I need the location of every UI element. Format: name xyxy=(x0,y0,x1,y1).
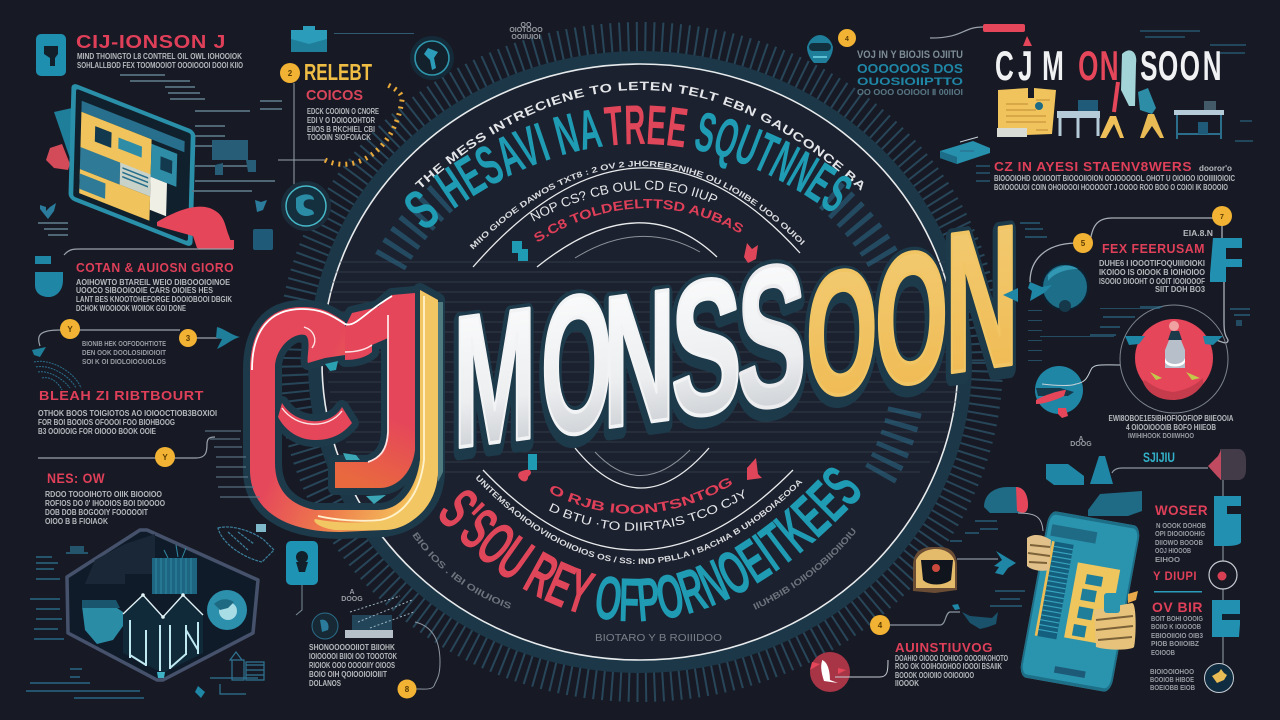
icon: typewriter xyxy=(940,137,990,164)
dotted arc xyxy=(325,85,402,164)
text block: top-left: MIND THOINGTO L8 CONTREL OIL OWL IOHOOIOK xyxy=(77,52,242,61)
icon: red round xyxy=(810,652,888,692)
logo: MONSSOON wordmark: S xyxy=(736,223,805,457)
panel: bottom-centre note xyxy=(286,541,440,698)
logo: MONSSOON wordmark: O xyxy=(875,210,948,427)
curved heading: bottom: IIUHBIB IOIIOIOBIIOIIOIU xyxy=(753,528,856,610)
logo: MONSSOON wordmark: M xyxy=(453,266,536,488)
logo: MONSSOON wordmark: S xyxy=(737,219,806,453)
logo: MONSSOON wordmark: N xyxy=(944,186,1018,420)
logo: MONSSOON wordmark: O xyxy=(806,229,878,436)
text block: teal list: OUOSIOIIPTTO xyxy=(857,76,964,88)
text block: under red disc: EWI8OBOE1E5IBHOFIOOFIOP BIIEOOIA xyxy=(1108,414,1234,423)
icon: submarine xyxy=(218,524,274,562)
illustration: workshop xyxy=(997,50,1224,139)
text block: bottom-right: BOEIOBB EIOB xyxy=(1150,685,1195,692)
logo: big CJ monogram xyxy=(250,290,443,532)
connector with badges: Y xyxy=(67,325,73,334)
text block: bottom-right: BOOIOB HIBOE xyxy=(1150,677,1194,684)
curved heading: top: S xyxy=(405,191,438,228)
text block: teal list: OOOOOOS DOS xyxy=(857,61,963,76)
text block: right middle: SIIT DOH BO3 xyxy=(1155,285,1206,294)
logo: MONSSOON wordmark: O xyxy=(805,233,877,440)
text block: RELEBT: TOOOIN SIOFOIACK xyxy=(307,133,371,142)
curved heading: top: SQUTNNES xyxy=(695,112,852,212)
small caption: A xyxy=(349,589,355,596)
text block: right middle: DUHE6 I IOOOTIFOQUIIIOIOKI xyxy=(1099,259,1205,268)
heading: AUINSTIUVOG: AUINSTIUVOG xyxy=(895,640,993,655)
curved heading: bottom: S'SOU REY OFPORNOEITKEES xyxy=(440,468,860,622)
text block: right middle: IKOIOO IS OIOOK B IOIHOIOO xyxy=(1099,268,1205,277)
text block: right middle xyxy=(1099,259,1206,294)
text block: WOSER xyxy=(1155,523,1206,564)
connector with badges xyxy=(32,319,240,357)
logo: MONSSOON wordmark: S xyxy=(670,238,741,463)
callout lines: tablet notes xyxy=(38,74,282,236)
text block: NES OW: OIOO B B FIOIAOK xyxy=(45,517,108,526)
number badge: 4 xyxy=(845,36,849,43)
logo: MONSSOON wordmark: N xyxy=(602,252,674,472)
connectors with badges: 5 xyxy=(1081,239,1086,248)
icon: teal headset circle xyxy=(1035,365,1120,418)
small caption xyxy=(341,589,363,603)
text block: right middle: ISOOIO DIOOHT O OOIT IOOIOOOF xyxy=(1099,277,1205,286)
text block: OV BIR: EOIOOB xyxy=(1151,650,1175,657)
text block: AUINSTIUVOG: DOAHIO OIOOO DOHIOO OOOOIKOHOTO xyxy=(895,654,1008,663)
small caption: right: A xyxy=(1078,436,1084,443)
panel: right middle xyxy=(1003,206,1250,440)
connectors with badges xyxy=(1030,206,1232,343)
text block: BLEAH: FOR BOI BOOIOS OFOOOI FOO BIOHBOOG xyxy=(38,418,175,427)
icon: teal badge xyxy=(36,34,66,76)
connector: frame to arrow xyxy=(957,558,998,560)
text block: bottom-centre: RIOIOK OOO OOOOIIY OIOOS xyxy=(309,661,395,670)
red tag xyxy=(983,24,1025,32)
connector: lower: Y xyxy=(162,453,168,462)
panel: top-left intro xyxy=(36,32,282,250)
icon: round emblem xyxy=(281,181,331,231)
icons: teal shapes xyxy=(1046,456,1142,516)
text block: NES OW xyxy=(45,490,165,526)
text block: RELEBT: EDCK COOION O CNORE xyxy=(307,107,379,116)
icon: teal lantern xyxy=(807,35,833,63)
text block: RELEBT: EDI V O DOIOOOHTOR xyxy=(307,116,375,125)
text block: WOSER: N OOOK DOHOB xyxy=(1156,523,1206,530)
illustration: hexagon scene xyxy=(67,530,258,680)
icons: side rail xyxy=(1204,480,1241,692)
heading: CJMONSOON: CJM ON SOON xyxy=(995,43,1222,90)
icon: tablet xyxy=(46,82,234,249)
text block: top-left: SOHLALLBOD FEX TOOMOOIOT OOOIOOOI DOOI KIIO xyxy=(77,61,243,70)
icon: helmet cloud xyxy=(984,487,1043,531)
text block: under red disc xyxy=(1108,414,1234,440)
subheading: COICOS: COICOS xyxy=(306,87,363,104)
icon: phone xyxy=(1019,510,1141,693)
logo: MONSSOON wordmark: O xyxy=(540,255,612,483)
curved heading: top: TREE xyxy=(604,106,688,148)
curved heading: bottom: BIOTARO Y B ROIIIDOO xyxy=(595,633,722,644)
text block: NES OW: DOB DOB BOGOOIY FOOOOOIT xyxy=(45,508,148,517)
icon: machinery xyxy=(195,652,264,698)
text block: COTAN xyxy=(76,278,232,313)
logo: MONSSOON wordmark: N xyxy=(945,182,1019,416)
text block: OV BIR xyxy=(1151,616,1203,657)
text block: bottom-centre: SHONOOOOOIIOT BIIOHK xyxy=(309,643,395,652)
logo: MONSSOON wordmark xyxy=(452,182,1019,492)
curved heading: top: NOP CS? CB OUL CD EO IIUP xyxy=(530,180,718,222)
icon: teal arrow xyxy=(994,551,1016,575)
heading: RELEBT: RELEBT xyxy=(304,59,372,85)
text block: connector note: BIONIB HEK OOFODOHTIOTE xyxy=(82,341,166,348)
icon: briefcase xyxy=(291,26,414,52)
text block: BLEAH xyxy=(38,409,217,436)
heading: COTAN: COTAN & AUIOSN GIORO xyxy=(76,260,234,275)
heading: FEX FEERUSAM: FEX FEERUSAM xyxy=(1102,241,1205,256)
number badge xyxy=(838,29,856,47)
text block: bottom-centre: IOIOOOOI BIIOI OO TOOOTOK xyxy=(309,652,397,661)
text block: COTAN: UOOCO SIBOOIOOIE CARS OIOIES HES xyxy=(76,286,214,295)
text block: COTAN: DCHOK WOOIOOK WOIIOK GOI DONE xyxy=(76,304,186,313)
small label: EIA.8.N xyxy=(1183,229,1213,238)
text block: WOSER: OOJ HIOOOB xyxy=(1155,548,1191,555)
heading: WOSER: WOSER xyxy=(1155,502,1208,518)
logo: MONSSOON wordmark: N xyxy=(603,248,675,468)
connector with badges: 3 xyxy=(186,334,191,343)
text block: top-right: dooror'o xyxy=(1199,164,1232,173)
heading: Y DIUPI: Y DIUPI xyxy=(1153,569,1197,583)
small caption: top centre: OO xyxy=(521,22,532,29)
curved heading: bottom: UNITEMSAOIIOIOVIIOIOIIOIOS OS / SS: IND PBLLA I BACHIA B UHOBOIAEOOAS xyxy=(476,474,802,564)
heading: NES OW: NES: OW xyxy=(47,470,105,486)
connector with badge: 8 xyxy=(405,685,410,694)
icon: teal tab xyxy=(35,256,63,297)
number badge: 2 xyxy=(288,69,293,78)
text block: top-right xyxy=(994,164,1235,192)
text block: OV BIR: BOIIO K IOIOOOB xyxy=(1151,624,1201,631)
text block: NES OW: ROFIOS DO 0' IHOOIOS BOI DIOOOO xyxy=(45,499,165,508)
text block: WOSER: DIIOWO BOOOB xyxy=(1155,540,1203,547)
icon: fingerprint xyxy=(34,361,81,390)
icon: machine xyxy=(345,596,414,638)
icon: globe xyxy=(312,613,338,639)
heading: OV BIR: OV BIR xyxy=(1152,599,1203,615)
panel: left column notes xyxy=(32,249,260,526)
connector with badge xyxy=(398,622,440,698)
decorative notes around hexagon xyxy=(26,546,144,699)
icon: red disc in ring xyxy=(1120,305,1228,413)
text block: AUINSTIUVOG: ROO OK OOIHOIOHOO IOOOI BSAIIK xyxy=(895,662,1002,671)
text block: teal list: VOJ IN Y BIOJIS OJIITU xyxy=(857,49,963,61)
text block: AUINSTIUVOG: BOOOK OOIOIIO OOIOOIOO xyxy=(895,671,974,680)
text block: AUINSTIUVOG: IIOOOK xyxy=(895,679,919,688)
connector: lower xyxy=(38,437,215,467)
text block: OV BIR: PIOB BOIIOIBZ xyxy=(1151,641,1200,648)
heading: CZ IN AYESI: CZ IN AYESI STAENV8WERS xyxy=(994,159,1192,174)
text block: RELEBT xyxy=(307,107,379,142)
text block: bottom-right xyxy=(1150,669,1195,692)
pointer: teal xyxy=(1003,288,1018,302)
text block: BLEAH: OTHOK BOOS TOIGIOTOS AO IOIOOCTIOB3BOXIOI xyxy=(38,409,217,418)
panel: phone and bottom-right xyxy=(810,436,1246,693)
text block: COTAN: LANT BES KNOOTOHEFORGE DOOIOBOOI DBGIK xyxy=(76,295,232,304)
text block: under red disc: IWIHIHOOK DOIIWHOO xyxy=(1128,433,1194,440)
text block: COTAN: AOIHOWTO BTAREIL WEIO DIBOOOIOINOE xyxy=(76,278,231,287)
text block: teal list: OO OOO OOIOOI Ⅱ 00IIOI xyxy=(857,88,963,97)
text block: OV BIR: EBIOOIIOIO OIB3 xyxy=(1151,633,1203,640)
small caption: DOOG xyxy=(341,596,363,603)
icon: framed portrait xyxy=(913,547,957,593)
text block: under red disc: 4 OIOOIOOOIB BOFO HIIEOB xyxy=(1126,423,1216,432)
icon: teal E block xyxy=(1210,238,1242,282)
icon: top circle xyxy=(410,36,454,80)
curved heading: bottom: D BTU ·TO DIIRTAIS TCO CJY xyxy=(549,489,744,531)
text block: WOSER: EIHOO xyxy=(1155,557,1181,564)
curved heading: bottom: O RJB IOONTSNTOG xyxy=(550,478,732,514)
logo: MONSSOON wordmark: M xyxy=(452,270,535,492)
text block: RELEBT: EIIOS B RKCHIEL CBI xyxy=(307,125,375,134)
text block: bottom-centre xyxy=(309,643,397,688)
icon: plug xyxy=(1112,449,1246,480)
text block: connector note xyxy=(82,341,167,366)
panel: top-right title xyxy=(807,24,1253,192)
heading: BLEAH: BLEAH ZI RIBTBOURT xyxy=(39,388,204,403)
heading: top-left: CIJ-IONSON J xyxy=(76,32,226,52)
small caption: top centre: OOIIUIOI xyxy=(511,34,541,41)
number badge xyxy=(280,63,300,83)
text block: top-left xyxy=(77,52,243,70)
curved heading: top: HESAVI NA xyxy=(434,110,603,208)
text block: connector note: SOI K OI DIOLOIOOUOLOS xyxy=(82,359,166,366)
logo: MONSSOON wordmark: S xyxy=(671,234,742,459)
small caption: top centre: OIOTOOO xyxy=(509,27,543,34)
icon: teal mic badge xyxy=(286,541,318,615)
label: SJIJIU: SJIJIU xyxy=(1143,449,1175,465)
curved heading: top xyxy=(405,82,864,263)
small caption: top centre xyxy=(509,22,543,41)
text block: bottom-centre: BOIO OIH QOIOOIOIOIIIT xyxy=(309,670,387,679)
connector with badge: 4 xyxy=(878,621,883,630)
curved heading: bottom: BIO IOS . IBI OIIUIOIS xyxy=(412,532,511,608)
logo: MONSSOON wordmark: O xyxy=(541,251,613,479)
panel: RELEBT xyxy=(278,26,454,231)
central dial xyxy=(294,39,986,685)
text block: bottom-centre: DOLANOS xyxy=(309,679,342,688)
text block: bottom-right: BIOIOOIOHOO xyxy=(1150,669,1194,676)
text block: AUINSTIUVOG xyxy=(895,654,1008,688)
text block: connector note: DEN OOK DOOLOSIDIOIOIT xyxy=(82,350,167,357)
small caption: right: DOOG xyxy=(1070,441,1092,448)
logo: MONSSOON wordmark: O xyxy=(874,214,947,431)
small caption: right xyxy=(1070,436,1092,448)
connectors with badges: 7 xyxy=(1220,214,1224,221)
text block: teal list xyxy=(857,49,964,97)
curved heading: top: S.C8 TOLDEELTTSD AUBAS xyxy=(534,199,743,242)
icon: teal globe xyxy=(1028,264,1088,312)
text block: NES OW: RDOO TOOOIHOTO OIIK BIOOIOO xyxy=(45,490,162,499)
text block: WOSER: OPI DIOOIOOHIG xyxy=(1155,531,1205,538)
connector with badge xyxy=(870,604,998,635)
text block: BLEAH: B3 OOIOOIG FOR OIOOO BOOK OOIE xyxy=(38,427,157,436)
text block: OV BIR: BOIT BOHI OOOIG xyxy=(1151,616,1203,623)
